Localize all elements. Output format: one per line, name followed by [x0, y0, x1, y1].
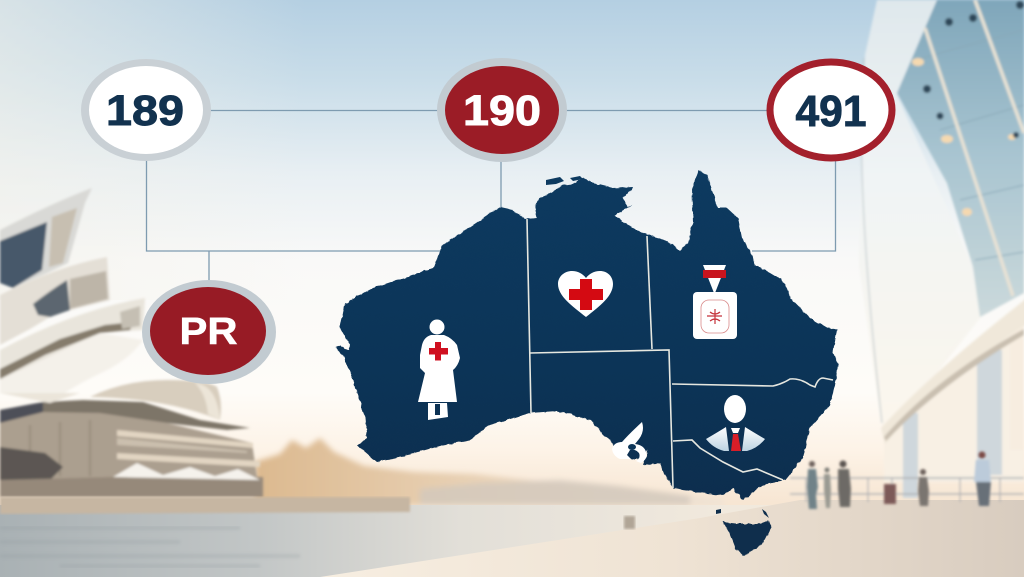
- building lights: [912, 58, 1016, 216]
- background: terminal building: [859, 0, 1024, 498]
- badge: 190: [437, 58, 567, 162]
- badge: 190: 190: [463, 87, 541, 135]
- badge: 189: [81, 59, 211, 161]
- opera house tents: [113, 463, 260, 480]
- background: quay: [0, 497, 410, 514]
- background: bollard: [624, 516, 635, 529]
- map of Australia: [335, 170, 838, 556]
- background: railing and people: [790, 452, 1024, 509]
- person: [838, 460, 851, 507]
- opera house lower big shell: [0, 333, 143, 403]
- badge: 189: 189: [106, 87, 184, 135]
- opera house plinth: [0, 477, 263, 497]
- background: promenade: [320, 500, 1024, 577]
- building facade: [859, 0, 981, 440]
- icon: business person: [706, 395, 765, 451]
- badge: PR: [142, 280, 276, 384]
- icon: microscope: [612, 422, 646, 463]
- mainland: [335, 170, 838, 500]
- background: opera house: [0, 188, 263, 497]
- person: [918, 469, 929, 506]
- northern islands: [546, 176, 583, 185]
- opera house dome: [90, 380, 221, 420]
- Tasmania: [723, 520, 771, 556]
- opera house terrace roof: [0, 400, 250, 430]
- person: [824, 468, 831, 508]
- person with pram: [884, 484, 896, 504]
- person in blue shirt: [974, 452, 991, 506]
- person: [807, 461, 818, 509]
- opera house third shell: [0, 298, 145, 380]
- opera house wall: [0, 412, 260, 497]
- badge: 491: [770, 62, 892, 158]
- icon: nurse: [418, 320, 460, 420]
- opera house second shell: [0, 257, 110, 345]
- badge: 491: 491: [796, 87, 866, 136]
- opera house terrace bands: [117, 430, 260, 467]
- connector lines: [146, 110, 836, 282]
- building balustrade: [881, 298, 1024, 444]
- Bass Strait islands: [716, 509, 769, 518]
- building lower wall: [884, 312, 1024, 482]
- background: far shore and palms: [255, 438, 724, 505]
- building columns: [903, 350, 1002, 498]
- badge: PR: PR: [180, 311, 238, 353]
- building struts: [925, 0, 1024, 296]
- background: water: [0, 505, 1024, 577]
- state borders: [527, 219, 833, 488]
- opera house dark entrance: [0, 447, 63, 487]
- icon: medal certificate: [693, 265, 737, 339]
- building glass roof: [897, 0, 1024, 317]
- icon: heart with cross: [558, 271, 613, 317]
- opera house top shell: [0, 188, 92, 288]
